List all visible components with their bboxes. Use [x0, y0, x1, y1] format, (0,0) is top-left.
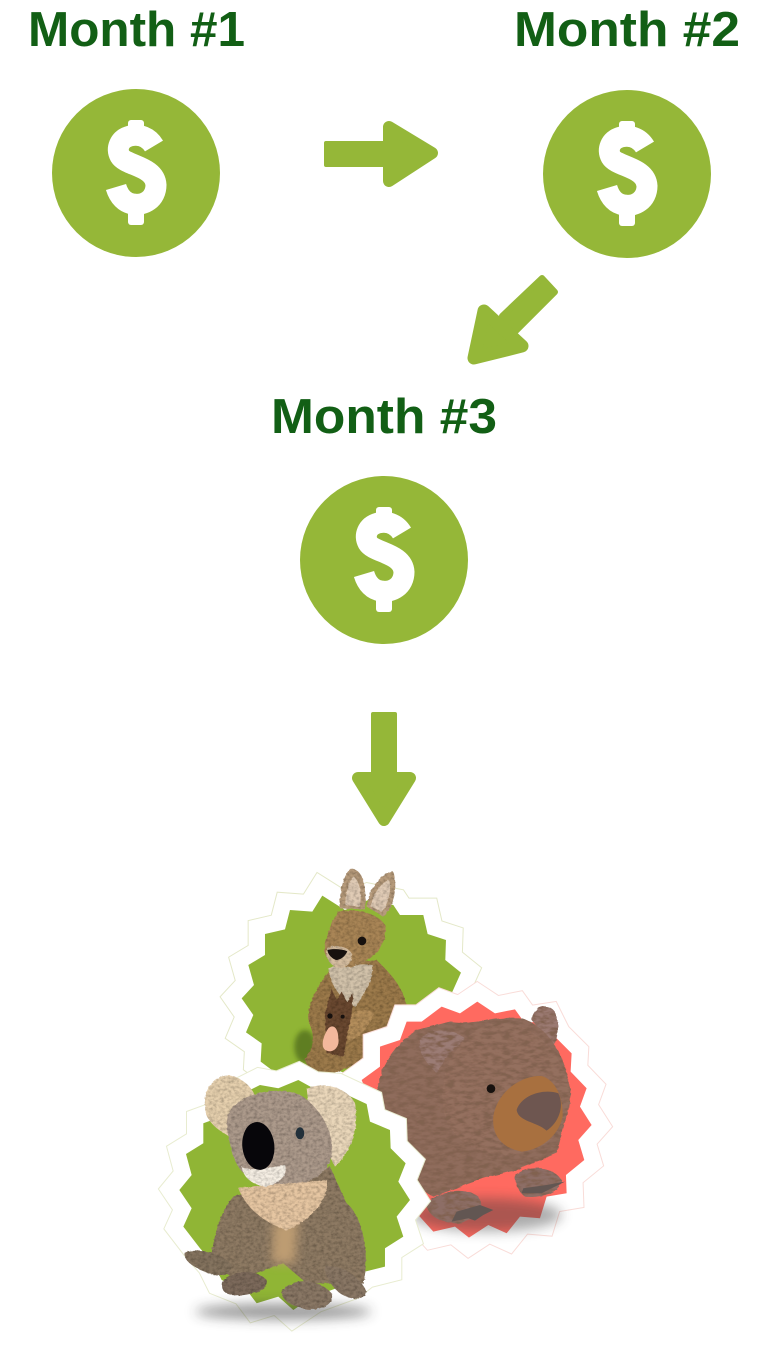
plush kangaroo with joey: [305, 868, 407, 1076]
badge: green star behind kangaroo: [242, 896, 461, 1080]
icon: dollar coin month 2: [543, 90, 711, 258]
badge: green star behind koala: [179, 1080, 410, 1310]
shadow under wombat: [412, 1198, 562, 1232]
plush koala: [184, 1076, 367, 1309]
arrow: month 2 to month 3: [474, 278, 555, 358]
plush toy group: [179, 868, 592, 1320]
heading: Month #1: Month #1: [28, 3, 245, 57]
arrow: month 3 down to plush toys: [358, 712, 410, 820]
icon: dollar coin month 1: [52, 89, 220, 257]
plush wombat: [377, 1006, 571, 1223]
badge: red star behind wombat: [362, 1002, 592, 1238]
heading: Month #3: Month #3: [271, 390, 497, 444]
shadow under koala: [195, 1304, 372, 1320]
heading: Month #2: Month #2: [514, 3, 740, 57]
arrow: month 1 to month 2: [324, 127, 432, 181]
icon: dollar coin month 3: [300, 476, 468, 644]
shadow under kangaroo: [294, 1030, 316, 1063]
